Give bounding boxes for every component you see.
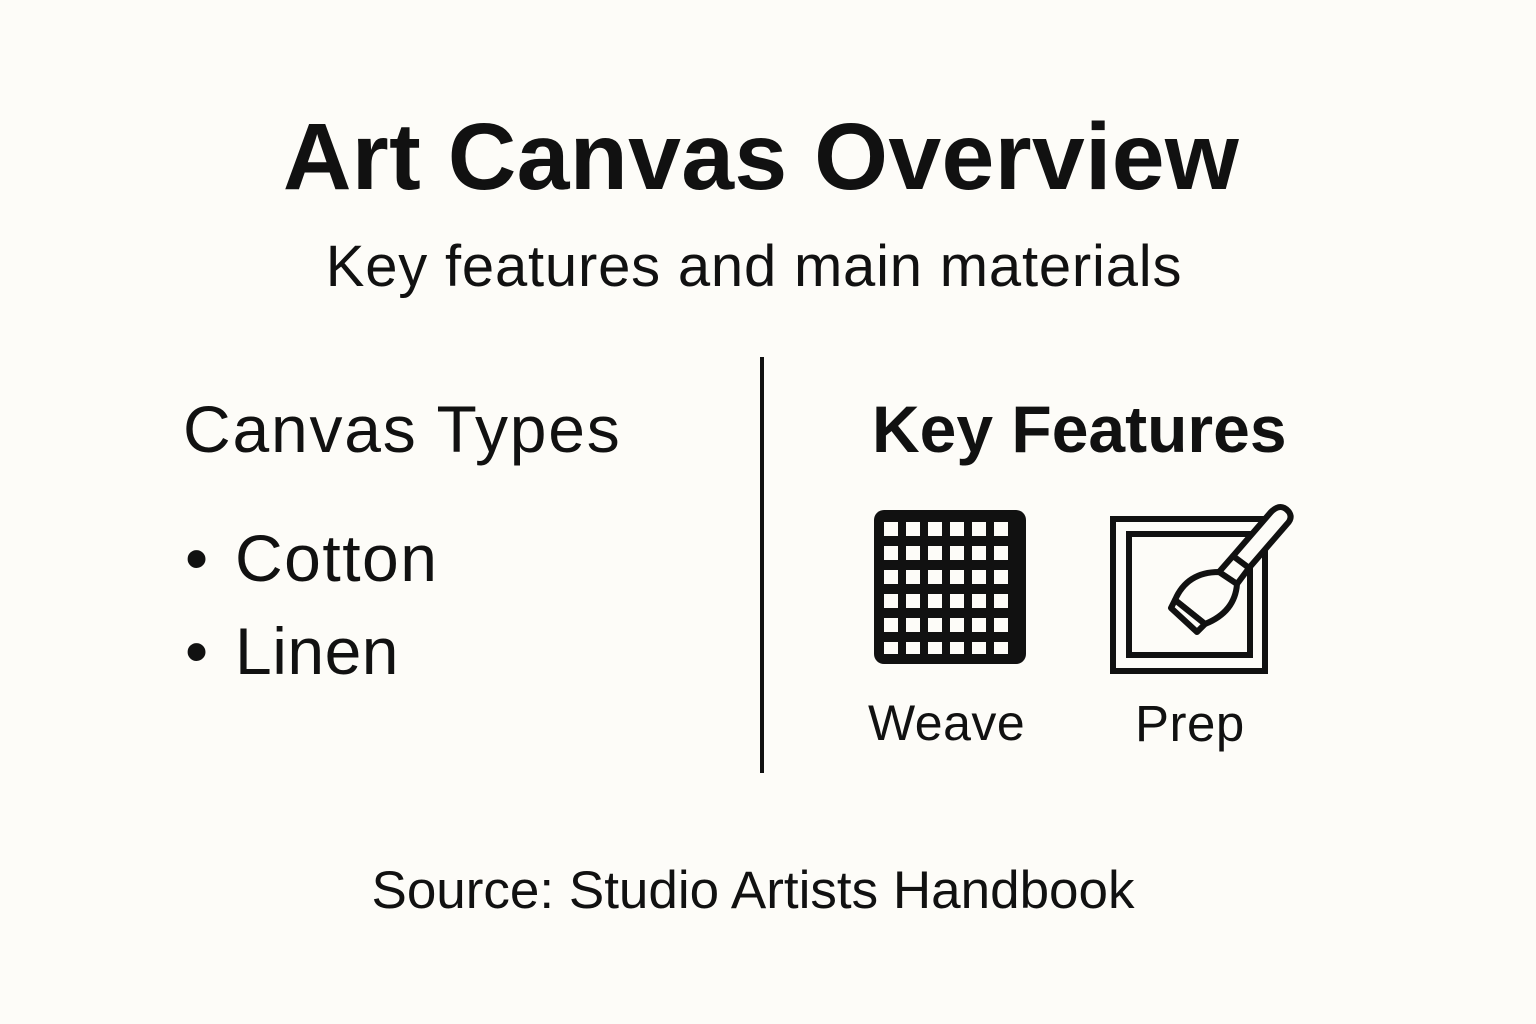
list: canvas types	[185, 521, 438, 688]
source: Source: Studio Artists Handbook	[371, 861, 1135, 920]
label: prep: Prep	[1135, 695, 1245, 752]
item: linen: •	[185, 614, 208, 688]
heading: Canvas Types: Canvas Types	[183, 392, 622, 466]
icon: prep	[1110, 504, 1294, 674]
item: linen: Linen	[235, 614, 399, 688]
item: cotton: Cotton	[235, 521, 438, 595]
label: weave: Weave	[868, 695, 1025, 751]
item: cotton: •	[185, 521, 208, 595]
divider	[760, 357, 764, 773]
subtitle: Key features and main materials	[326, 234, 1182, 299]
title: Art Canvas Overview	[283, 104, 1239, 210]
icon: weave	[874, 510, 1026, 664]
heading: Key Features: Key Features	[872, 392, 1287, 466]
